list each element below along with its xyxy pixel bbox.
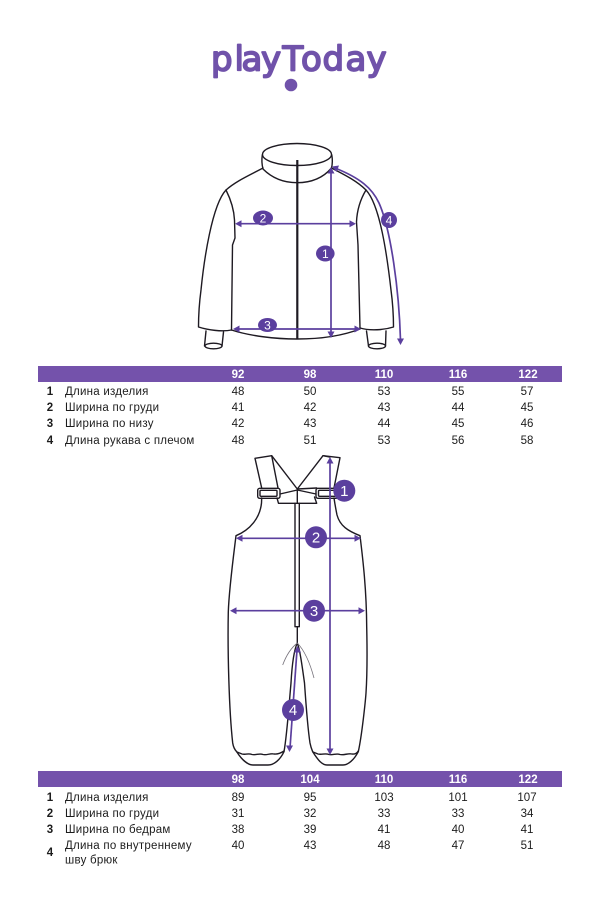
measure 4: sleeve length arrow [332, 166, 404, 345]
jacket body [226, 168, 366, 339]
jacket sleeves and cuffs [198, 190, 394, 349]
row 1: 103 [374, 792, 394, 804]
row 2: 42 [304, 402, 316, 414]
row 1: 101 [448, 792, 468, 804]
row 3: Ширина по низу [65, 418, 154, 430]
row 1: Длина изделия [65, 792, 149, 804]
row 4: 58 [521, 435, 533, 447]
row 3: 45 [452, 418, 464, 430]
row 4: 4 [47, 435, 54, 447]
row 3 [47, 418, 533, 430]
row 4: Длина по внутреннему [65, 840, 192, 852]
row 2: 34 [521, 808, 534, 820]
table header: 98 [232, 774, 245, 786]
overalls cuffs [237, 751, 358, 755]
measure 3: hem width arrow: 3 [264, 318, 271, 332]
row 4 [47, 840, 533, 866]
row 2: 45 [521, 402, 533, 414]
row 1: 57 [521, 386, 533, 398]
measure 1: overalls length arrow [326, 457, 355, 755]
row 2: 33 [378, 808, 390, 820]
measure 1: overalls length arrow: 1 [340, 483, 348, 500]
row 3: 41 [521, 824, 533, 836]
row 2: 32 [304, 808, 316, 820]
jacket zipper [296, 160, 298, 339]
row 3: 3 [47, 824, 53, 836]
row 4: шву брюк [65, 854, 118, 866]
row 1: 107 [517, 792, 537, 804]
table header: 110 [375, 774, 393, 786]
overalls crotch stress lines [283, 643, 314, 678]
row 1 [47, 792, 537, 804]
table header [38, 771, 562, 787]
row 2: 2 [47, 402, 53, 414]
row 4: 51 [304, 435, 316, 447]
row 1: 95 [304, 792, 316, 804]
measure 3: hem width arrow [233, 318, 361, 332]
row 2: 33 [452, 808, 464, 820]
measure 2: overalls chest arrow [236, 526, 361, 548]
row 3: 40 [452, 824, 464, 836]
row 1: 48 [232, 386, 244, 398]
row 4: 53 [378, 435, 390, 447]
row 3: 41 [378, 824, 390, 836]
table header: 116 [449, 774, 467, 786]
measure 4: sleeve length arrow: 4 [386, 213, 393, 227]
row 4 [47, 435, 533, 447]
row 2: 44 [452, 402, 465, 414]
row 3: Ширина по бедрам [65, 824, 171, 836]
row 3: 46 [521, 418, 533, 430]
row 2: 41 [232, 402, 244, 414]
row 2: 2 [47, 808, 53, 820]
measure 2: chest width arrow [235, 210, 356, 227]
overalls bib [277, 490, 317, 503]
row 2 [47, 402, 533, 414]
overalls size table [38, 771, 562, 866]
measure 3: overalls hip arrow [230, 600, 365, 622]
row 4: 4 [47, 847, 54, 859]
measure 3: overalls hip arrow: 3 [310, 603, 318, 620]
jacket size table [38, 366, 562, 447]
row 1 [47, 386, 533, 398]
table header: 104 [300, 774, 320, 786]
table header: 98 [304, 369, 317, 381]
row 4: 56 [452, 435, 464, 447]
row 3: 43 [304, 418, 316, 430]
row 3: 3 [47, 418, 53, 430]
row 4: 48 [378, 840, 390, 852]
row 4: Длина рукава с плечом [65, 435, 195, 447]
row 4: 40 [232, 840, 244, 852]
overalls buckles [258, 488, 338, 498]
row 1: Длина изделия [65, 386, 149, 398]
measure 4: inseam arrow [282, 646, 304, 752]
row 1: 89 [232, 792, 244, 804]
row 3: 42 [232, 418, 244, 430]
row 2: 31 [232, 808, 244, 820]
row 1: 55 [452, 386, 464, 398]
table header: 116 [449, 369, 467, 381]
row 2: Ширина по груди [65, 402, 159, 414]
measure 4: inseam arrow: 4 [289, 702, 297, 719]
row 2 [47, 808, 534, 820]
table header: 122 [518, 369, 538, 381]
table header: 110 [375, 369, 393, 381]
jacket collar [262, 144, 332, 183]
row 1: 50 [304, 386, 316, 398]
row 3 [47, 824, 533, 836]
row 3: 44 [378, 418, 391, 430]
jacket technical drawing [198, 144, 404, 349]
row 2: 43 [378, 402, 390, 414]
row 4: 51 [521, 840, 533, 852]
overalls straps [255, 456, 340, 489]
logo: playToday: playToday [211, 40, 387, 80]
row 1: 1 [47, 792, 54, 804]
row 3: 39 [304, 824, 316, 836]
measure 1: jacket length arrow: 1 [322, 247, 329, 261]
row 4: 48 [232, 435, 244, 447]
row 4: 47 [452, 840, 464, 852]
row 4: 43 [304, 840, 316, 852]
measure 2: overalls chest arrow: 2 [312, 530, 320, 546]
overalls body outline [228, 498, 367, 765]
row 3: 38 [232, 824, 244, 836]
measure 1: jacket length arrow [316, 167, 335, 338]
row 1: 1 [47, 386, 54, 398]
overalls technical drawing [228, 456, 367, 765]
overalls zipper [295, 503, 299, 643]
table header [38, 366, 562, 382]
row 1: 53 [378, 386, 390, 398]
table header: 92 [232, 369, 244, 381]
row 2: Ширина по груди [65, 808, 159, 820]
table header: 122 [518, 774, 538, 786]
measure 2: chest width arrow: 2 [260, 211, 267, 225]
